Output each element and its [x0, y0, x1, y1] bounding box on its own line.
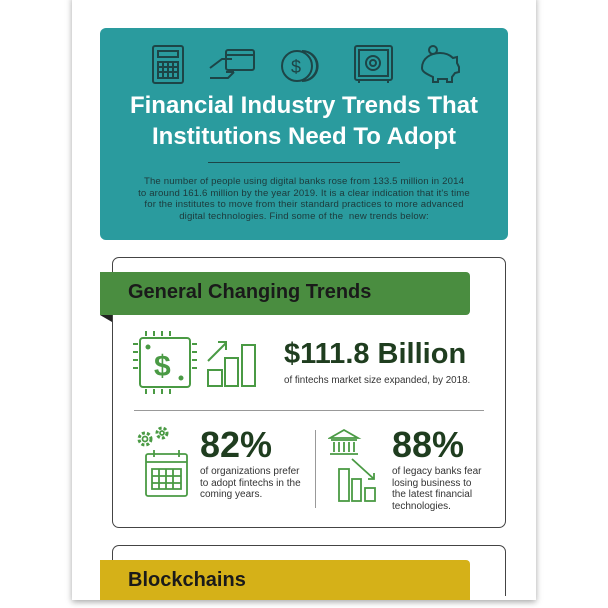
divider [134, 410, 484, 411]
stat: 82%: of organizations prefer [200, 466, 300, 477]
icon: safe [355, 46, 392, 83]
stat: 82%: 82% [200, 424, 272, 465]
title: Institutions Need To Adopt [152, 123, 456, 150]
vertical divider [315, 430, 316, 508]
banner: general changing trends [100, 272, 470, 315]
stat: 82%: to adopt fintechs in the [200, 478, 301, 488]
title [130, 92, 478, 150]
icon: dollar chip and bar chart [133, 331, 256, 394]
icon: bank and declining bars [328, 429, 376, 502]
stat: 82% [200, 424, 301, 500]
stat: 88%: 88% [392, 424, 464, 465]
paper [72, 0, 536, 600]
icon: coins [282, 51, 318, 81]
stat: 88%: the latest financial [392, 489, 472, 500]
icon row [152, 45, 460, 84]
stat: 88%: losing business to [392, 478, 472, 488]
stat: 111.8 billion: $111.8 Billion [284, 338, 466, 370]
icon: piggy bank [422, 46, 459, 82]
title: Financial Industry Trends That [130, 92, 478, 119]
stat: 111.8 billion [284, 338, 470, 386]
panel: blockchains [112, 545, 506, 596]
stat: 82%: coming years. [200, 489, 262, 500]
banner: blockchains: Blockchains [128, 569, 246, 591]
stat: 111.8 billion: of fintechs market size expanded, by 2018. [284, 375, 470, 386]
intro text: to around 161.6 million by the year 2019. It is a clear indication that it's time [138, 188, 470, 198]
intro text [138, 176, 470, 222]
banner: general changing trends: General Changing Trends [128, 281, 371, 303]
header panel [100, 28, 508, 240]
panel: general changing trends [112, 257, 506, 528]
icon: dollar chip and bar chart: $ [154, 350, 171, 383]
banner fold [100, 315, 112, 322]
intro text: for the institutes to move from their standard practices to more advanced [144, 199, 464, 210]
icon: gears and calendar [138, 426, 188, 497]
icon: calculator [153, 46, 183, 83]
icon: coins: $ [291, 57, 301, 77]
divider [208, 162, 400, 163]
icon: card in hand [210, 50, 254, 78]
banner: blockchains [100, 560, 470, 600]
intro text: digital technologies. Find some of the new trends below: [179, 210, 429, 222]
stat: 88% [392, 424, 482, 512]
stat: 88%: technologies. [392, 500, 451, 512]
intro text: The number of people using digital banks rose from 133.5 million in 2014 [144, 176, 464, 187]
stat: 88%: of legacy banks fear [392, 466, 482, 477]
